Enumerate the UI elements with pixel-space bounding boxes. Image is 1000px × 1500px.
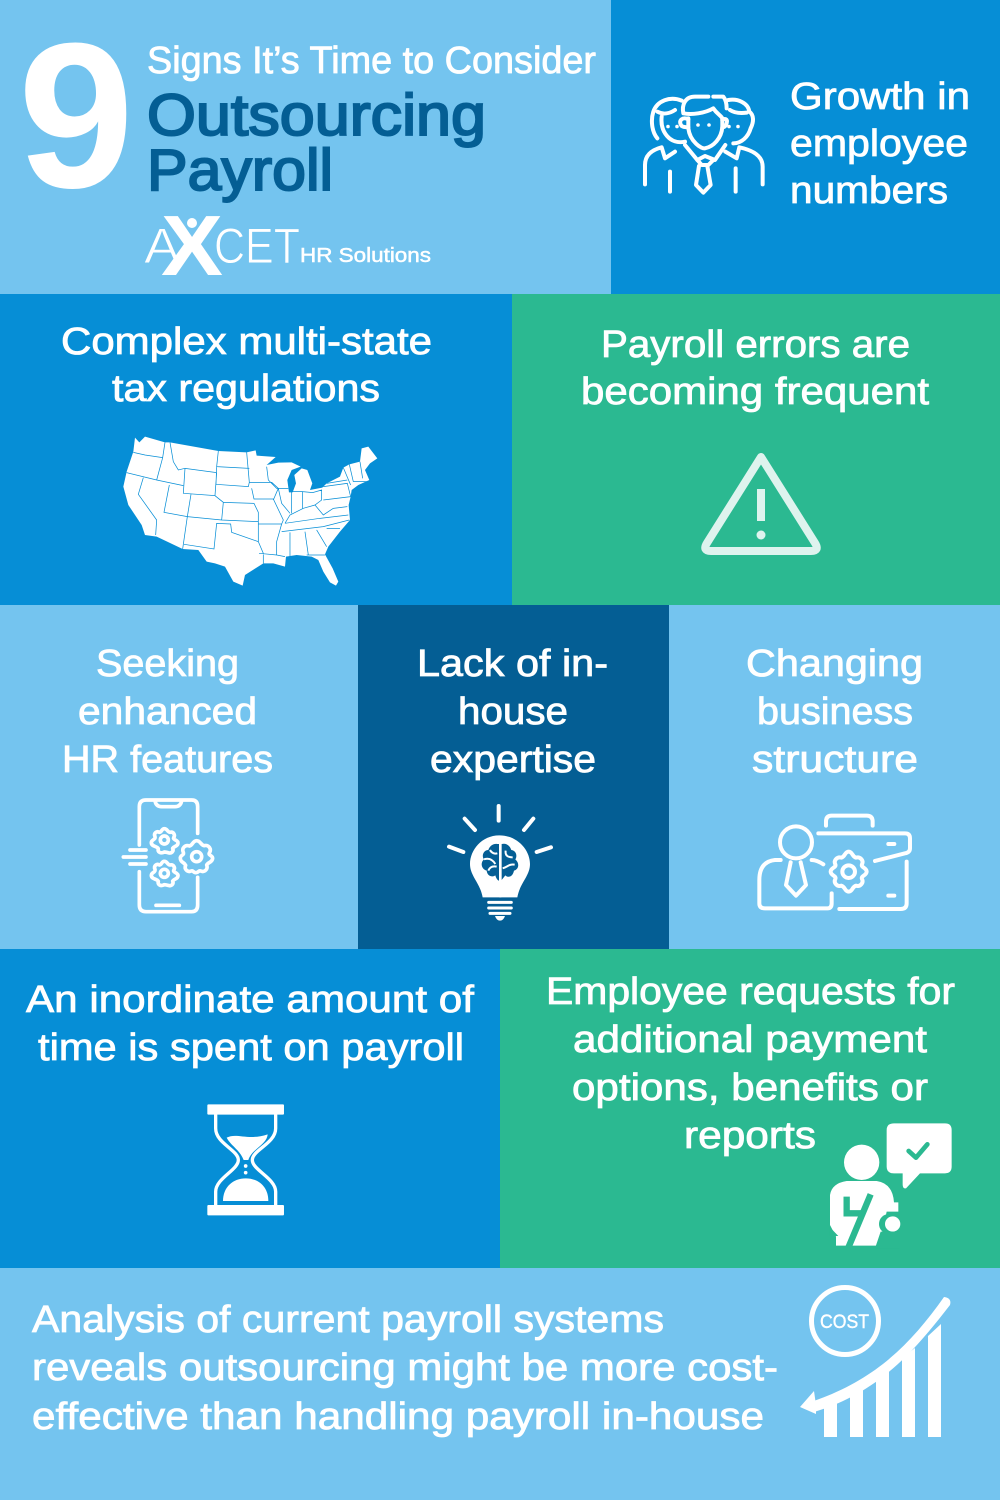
icon: hourglass bbox=[207, 1104, 284, 1215]
heading: growth: employee bbox=[790, 123, 968, 165]
heading: growth: Growth in bbox=[790, 76, 970, 118]
logo: Axcet HR Solutions: HR Solutions bbox=[300, 245, 431, 267]
heading: tax regulations bbox=[61, 321, 432, 410]
icon: person with speech bubble bbox=[829, 1123, 952, 1248]
heading: outsourcing payroll: Outsourcing bbox=[147, 83, 486, 148]
panel: growth in employee numbers bbox=[611, 0, 1000, 294]
logo: Axcet HR Solutions: CET bbox=[214, 218, 300, 274]
panel: title header bbox=[0, 0, 611, 294]
logo: Axcet HR Solutions bbox=[144, 199, 431, 294]
heading: outsourcing payroll bbox=[147, 83, 486, 203]
heading: expertise bbox=[417, 643, 608, 781]
heading: employee requests: additional payment bbox=[573, 1019, 927, 1061]
icon: warning triangle bbox=[705, 457, 817, 551]
heading: employee requests: Employee requests for bbox=[546, 971, 955, 1013]
heading: payroll errors: Payroll errors are bbox=[601, 324, 910, 366]
icon: person, gear and briefcase bbox=[759, 816, 910, 909]
heading: expertise: expertise bbox=[430, 739, 596, 781]
heading: time spent: An inordinate amount of bbox=[26, 979, 474, 1021]
heading: business structure: business bbox=[757, 691, 913, 733]
icon: US map bbox=[123, 437, 377, 586]
heading: expertise: house bbox=[458, 691, 568, 733]
heading: expertise: Lack of in- bbox=[417, 643, 608, 685]
panel: employee requests bbox=[500, 949, 1000, 1268]
icon: light bulb with brain bbox=[449, 806, 551, 921]
panel: time spent on payroll bbox=[0, 949, 500, 1268]
text: cost analysis: effective than handling payroll in-house bbox=[32, 1396, 764, 1438]
heading: signs line: Signs It’s Time to Consider bbox=[147, 40, 596, 82]
heading: tax regulations: Complex multi-state bbox=[61, 321, 432, 363]
heading: HR features bbox=[62, 643, 273, 781]
heading: business structure: structure bbox=[752, 739, 918, 781]
text: cost analysis: Analysis of current payroll systems bbox=[32, 1299, 664, 1341]
panel: multi-state tax regulations bbox=[0, 294, 512, 605]
heading: tax regulations: tax regulations bbox=[112, 368, 380, 410]
heading: business structure: Changing bbox=[746, 643, 923, 685]
text: cost analysis: reveals outsourcing might be more cost- bbox=[32, 1347, 778, 1389]
heading: employee requests: options, benefits or bbox=[572, 1067, 928, 1109]
panel: changing business structure bbox=[669, 605, 1000, 949]
big number 9: 9 bbox=[18, 0, 134, 231]
icon: phone with gears bbox=[123, 800, 213, 912]
logo: Axcet HR Solutions: A bbox=[144, 218, 181, 274]
heading: HR features: Seeking bbox=[96, 643, 239, 685]
heading: employee requests: reports bbox=[684, 1115, 816, 1157]
panel: enhanced HR features bbox=[0, 605, 358, 949]
heading: time spent bbox=[26, 979, 474, 1069]
heading: growth bbox=[790, 76, 970, 212]
icon: cost chart with arrow bbox=[800, 1288, 950, 1437]
panel: lack of in-house expertise bbox=[358, 605, 669, 949]
icon: three employees bbox=[645, 97, 763, 193]
heading: business structure bbox=[746, 643, 923, 781]
heading: payroll errors: becoming frequent bbox=[581, 371, 929, 413]
logo: Axcet HR Solutions: X bbox=[161, 199, 223, 294]
heading: employee requests bbox=[546, 971, 955, 1157]
panel: cost analysis bbox=[0, 1268, 1000, 1500]
heading: HR features: enhanced bbox=[78, 691, 257, 733]
text: cost analysis bbox=[32, 1299, 778, 1438]
heading: payroll errors bbox=[581, 324, 929, 413]
heading: growth: numbers bbox=[790, 170, 948, 212]
icon: cost chart with arrow: COST bbox=[820, 1312, 869, 1333]
heading: outsourcing payroll: Payroll bbox=[147, 138, 333, 203]
panel: payroll errors bbox=[512, 294, 1000, 605]
heading: time spent: time is spent on payroll bbox=[38, 1027, 464, 1069]
heading: HR features: HR features bbox=[62, 739, 273, 781]
